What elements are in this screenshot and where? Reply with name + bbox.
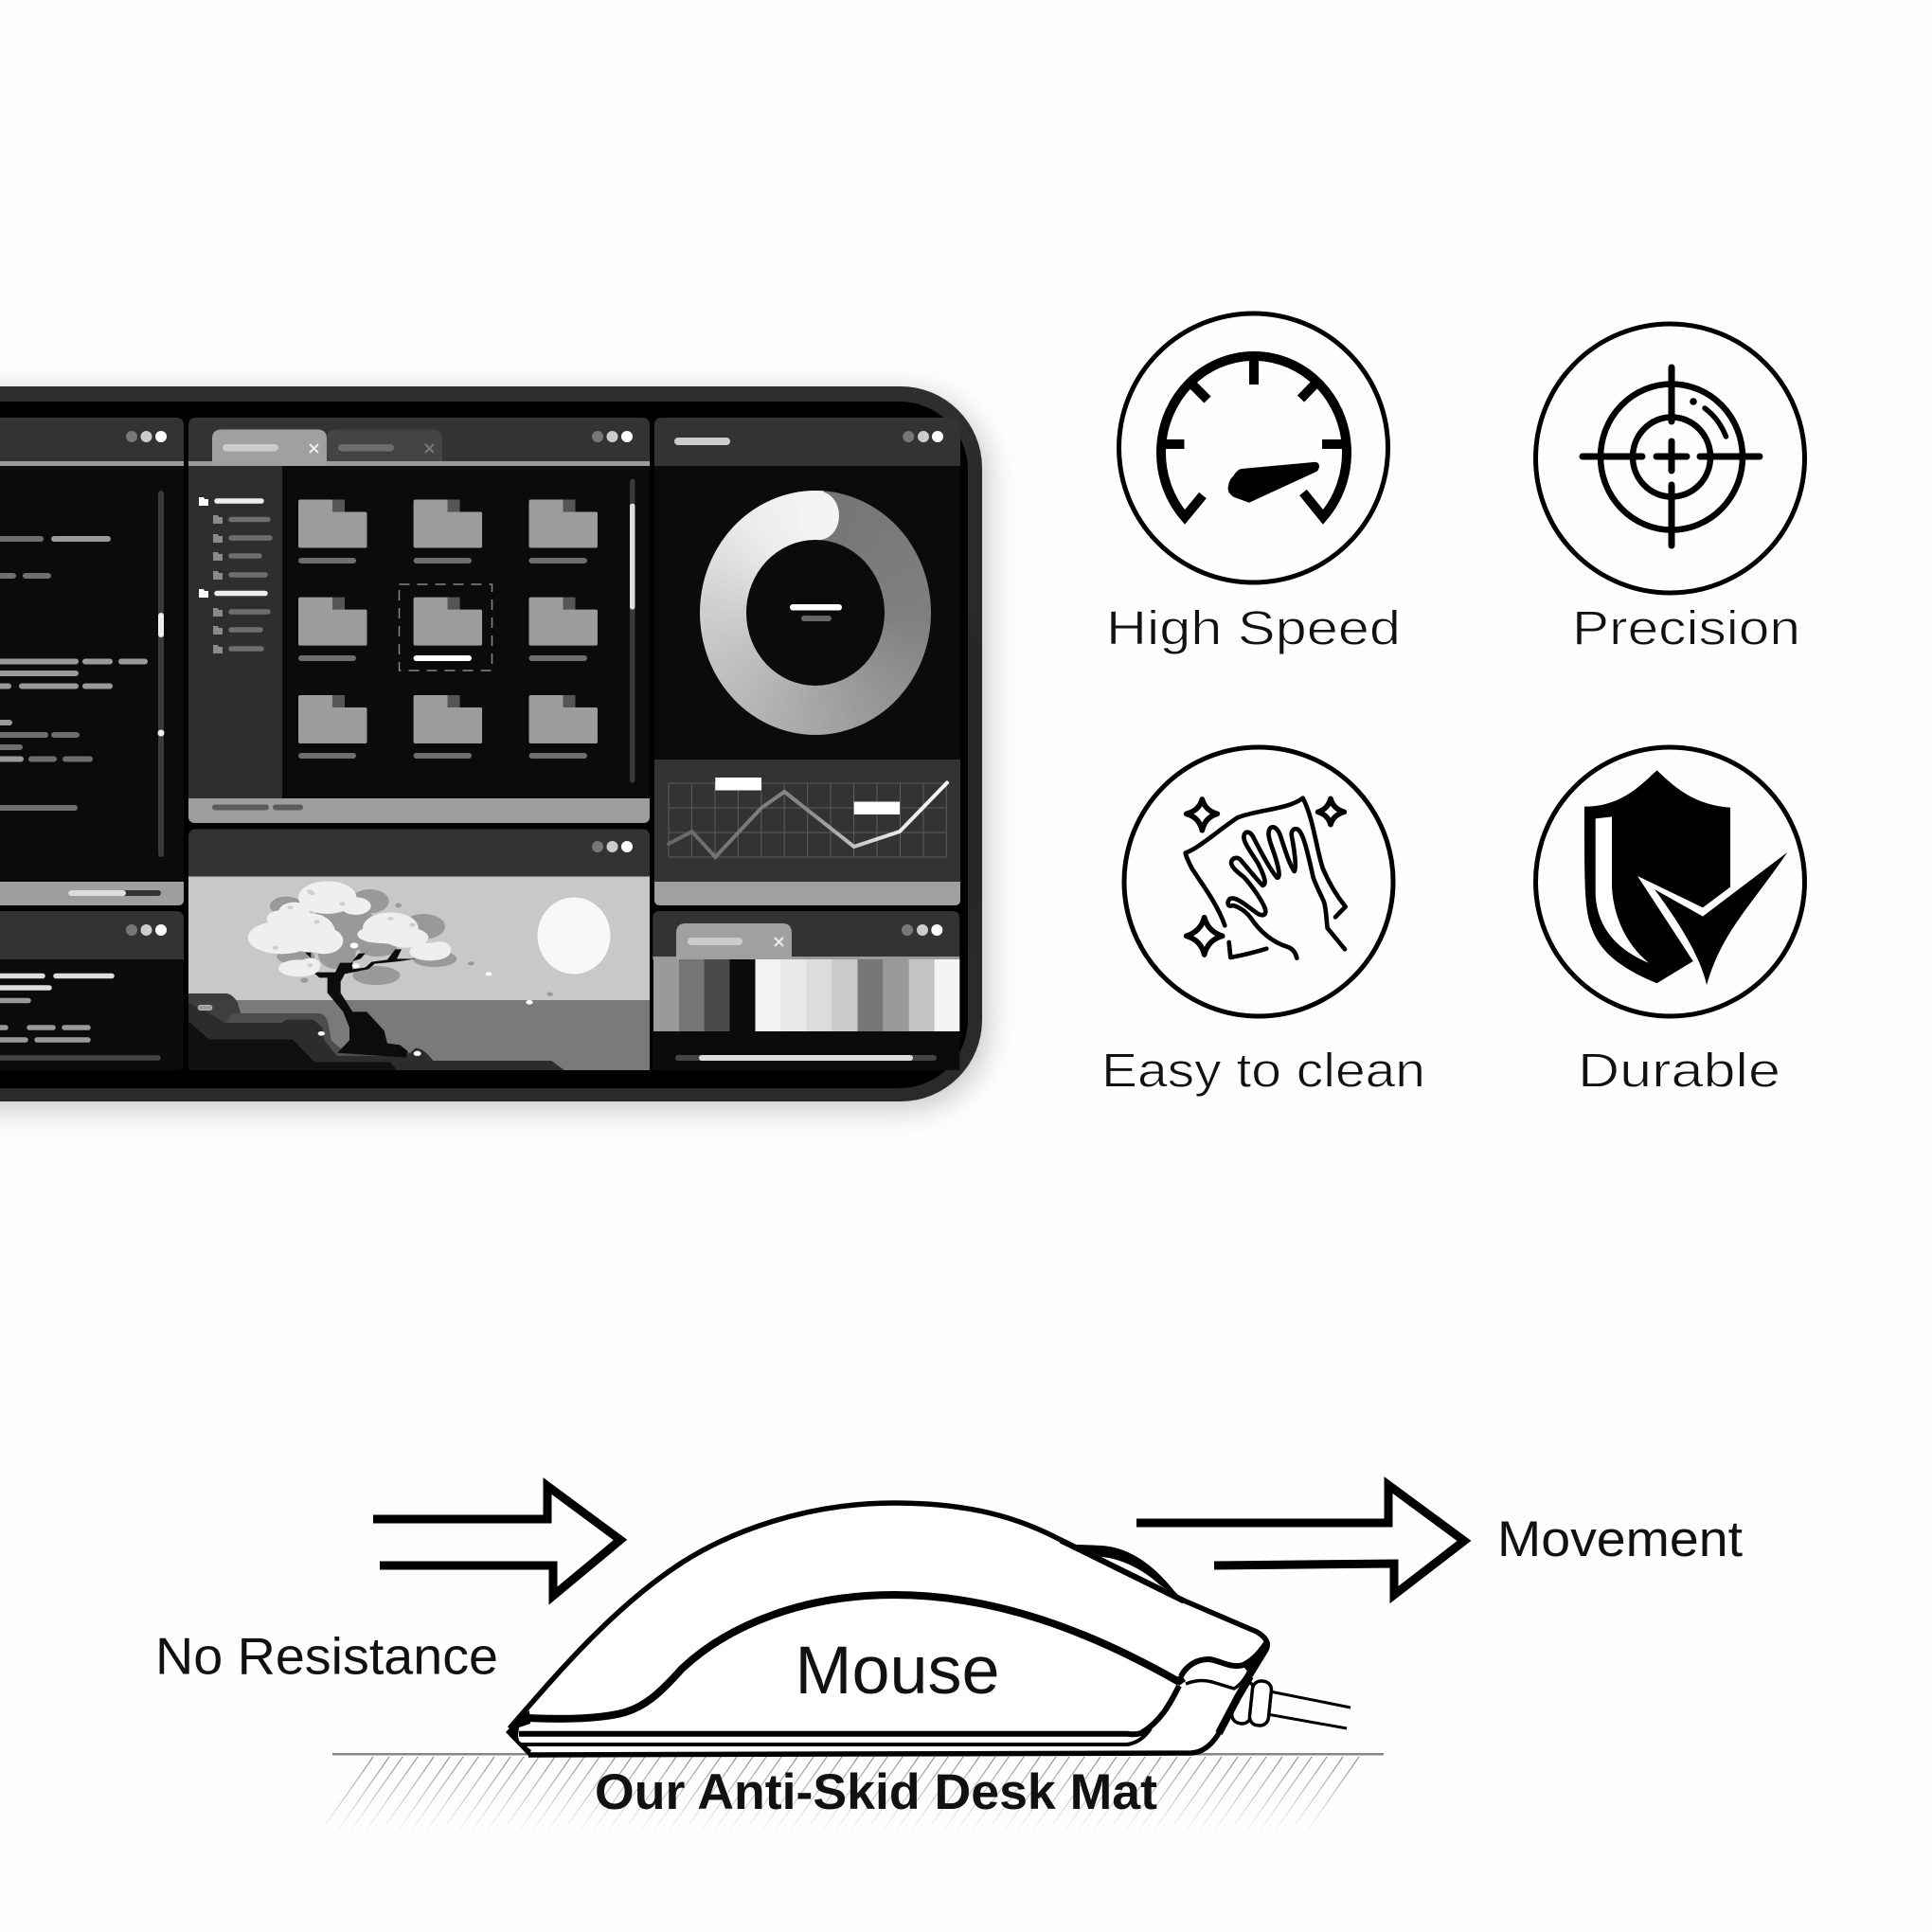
window dots xyxy=(592,431,633,442)
window: code snippet xyxy=(0,911,184,1070)
window: code editor xyxy=(0,418,184,905)
label: High Speed: High Speed xyxy=(1106,601,1401,655)
mouse outline xyxy=(506,1503,1267,1756)
label: No Resistance: No Resistance xyxy=(155,1627,498,1686)
icon: crosshair target xyxy=(1536,324,1805,593)
colour swatches xyxy=(653,959,959,1031)
mouse rear edge xyxy=(1219,1676,1250,1733)
inactive tab xyxy=(327,430,442,461)
window: file browser xyxy=(188,418,650,823)
rear shell waves xyxy=(1181,1643,1266,1676)
label: Movement: Movement xyxy=(1497,1512,1743,1567)
active tab xyxy=(212,430,327,466)
donut chart xyxy=(700,491,931,735)
window: donut and line chart xyxy=(654,418,960,905)
icon: speedometer xyxy=(1119,313,1388,582)
mouse cable xyxy=(1230,1680,1351,1728)
icon: hand wiping with cloth xyxy=(1124,747,1393,1016)
window: landscape image xyxy=(188,830,650,1070)
label: Durable: Durable xyxy=(1578,1044,1780,1098)
folder tree xyxy=(199,497,270,653)
window: colour palette xyxy=(653,911,959,1070)
label: Mouse: Mouse xyxy=(796,1634,1000,1708)
arrow: no resistance xyxy=(373,1486,620,1596)
mat surface hatching xyxy=(317,1753,1384,1833)
icon: shield with check mark xyxy=(1536,747,1805,1016)
scroll wheel xyxy=(1076,1545,1186,1602)
folder grid xyxy=(298,500,598,756)
mat surface xyxy=(0,402,968,1088)
illustration: sky, sun and sea xyxy=(188,877,650,1070)
mouse nose xyxy=(506,1710,531,1756)
label: Our Anti-Skid Desk Mat: Our Anti-Skid Desk Mat xyxy=(595,1764,1157,1820)
label: Precision: Precision xyxy=(1572,601,1800,655)
panel: desk mat xyxy=(0,386,982,1101)
mat rim xyxy=(0,386,982,1101)
palette tab xyxy=(676,923,792,959)
line chart xyxy=(669,778,947,857)
diagram: mouse on anti-skid mat xyxy=(317,1503,1384,1833)
grip arc xyxy=(528,1595,1179,1719)
illustration: tree on a cliff xyxy=(188,881,564,1070)
arrow: movement xyxy=(1136,1485,1464,1595)
label: Easy to clean: Easy to clean xyxy=(1101,1044,1425,1098)
